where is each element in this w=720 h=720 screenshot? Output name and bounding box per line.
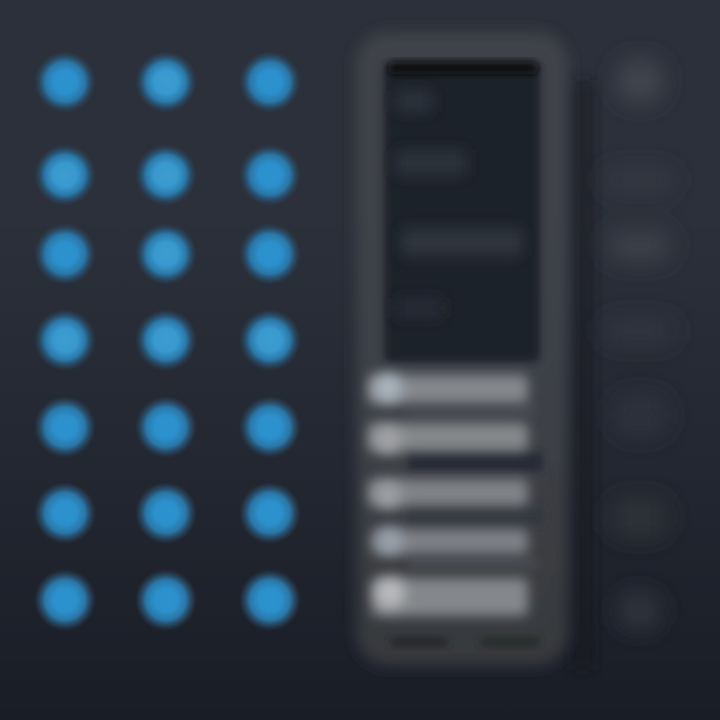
- screen rows: [396, 90, 522, 318]
- right column: dim icons: [604, 60, 674, 630]
- list rows: [368, 375, 528, 616]
- phone shadow: [572, 80, 594, 670]
- icon grid: blue dots: [34, 51, 301, 631]
- column 3 dots: [239, 51, 301, 631]
- column 2 dots: [135, 51, 197, 631]
- row icons: [374, 374, 405, 608]
- phone: [356, 32, 594, 670]
- phone screen: [384, 64, 540, 362]
- screen top shadow: [388, 62, 538, 74]
- row separators: [408, 404, 543, 570]
- bottom buttons: [390, 637, 540, 647]
- column 1 dots: [34, 51, 96, 631]
- phone frame: [356, 32, 568, 666]
